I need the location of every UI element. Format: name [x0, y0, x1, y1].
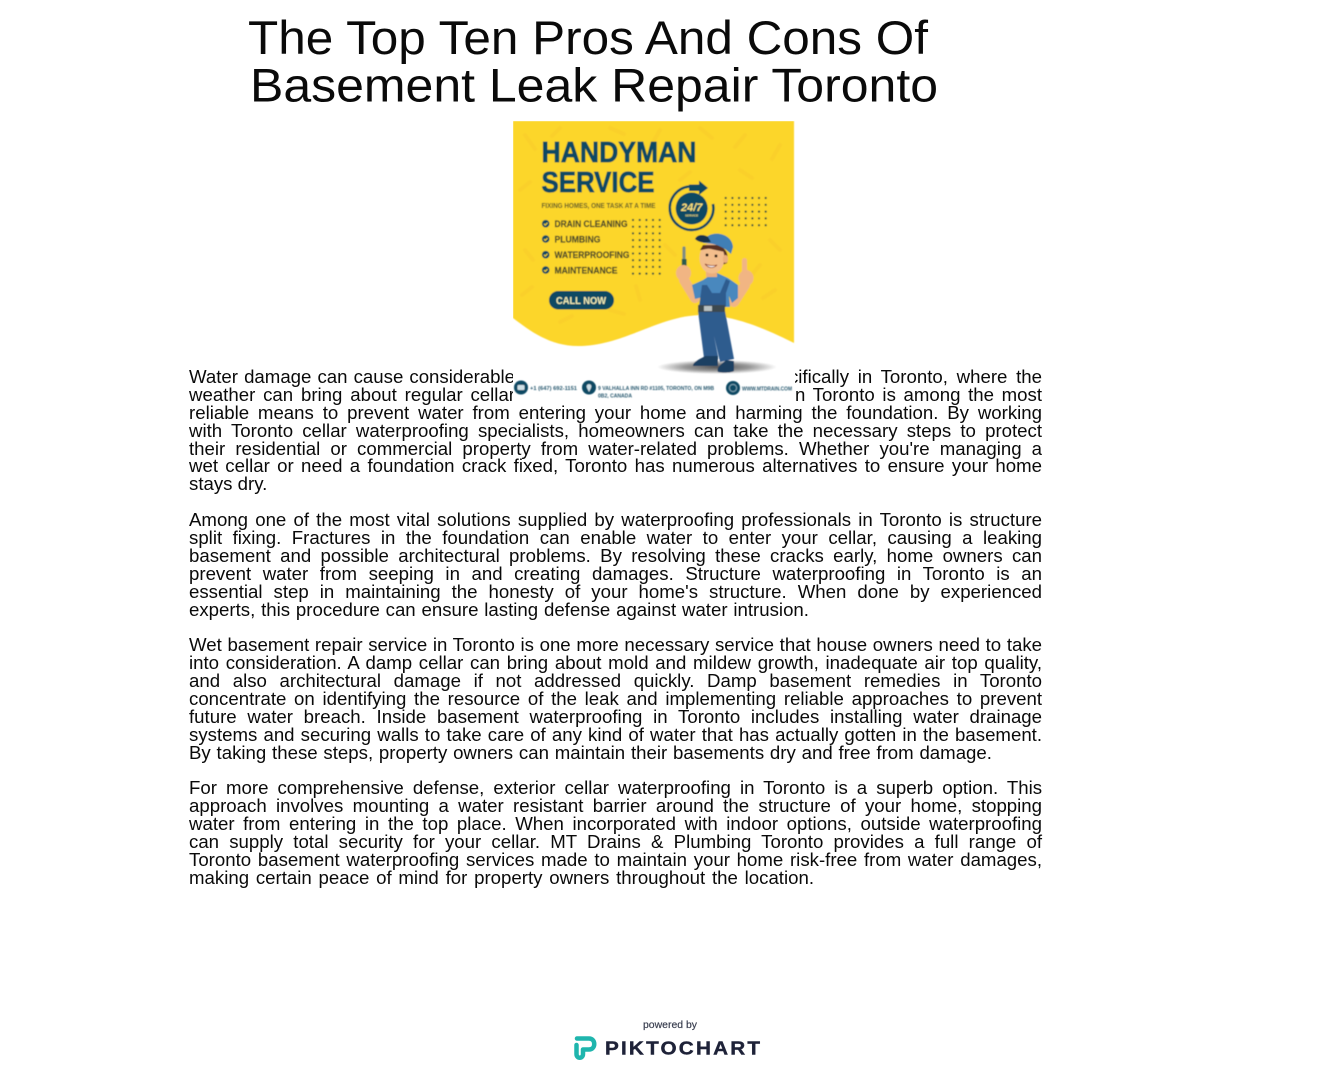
yellow wavy background: [513, 121, 794, 346]
paragraph: wet basement repair: concentrate on identifying the resource of the leak and implementing reliable approaches to prevent: [189, 689, 1042, 709]
heading: SERVICE: [542, 167, 654, 199]
title: The Top Ten Pros And Cons Of: [248, 11, 929, 64]
heading: [542, 137, 696, 199]
paragraph: foundation crack repair: basement and possible architectural problems. By resolving these cracks early, home owners can: [189, 546, 1042, 566]
paragraph: wet basement repair: and also architectural damage if not addressed quickly. Damp basement remedies in Toronto: [189, 671, 1042, 691]
paragraph: exterior waterproofing: Toronto basement waterproofing services made to maintain your home risk-free from water damages,: [189, 850, 1042, 870]
handyman service advert image: [513, 121, 795, 400]
powered by piktochart logo: [574, 1019, 760, 1060]
dot grids: [632, 197, 767, 275]
paragraph: foundation crack repair: experts, this procedure can ensure lasting defense against water intrusion.: [189, 600, 809, 620]
service checklist: DRAIN CLEANING: [554, 219, 628, 229]
paragraph: wet basement repair: systems and securing walls to take care of any kind of water that has actually gotten in the basement.: [189, 725, 1042, 745]
paragraph: foundation crack repair: Among one of the most vital solutions supplied by waterproofing professionals in Toronto is structure: [189, 510, 1042, 530]
paragraph: wet basement repair: [189, 635, 1042, 763]
title: [248, 11, 938, 112]
handyman character: [657, 234, 777, 374]
screwdriver: [682, 248, 686, 260]
paragraph: wet basement repair: future water breach. Inside basement waterproofing in Toronto includes installing water drainage: [189, 707, 1042, 727]
overalls: [699, 279, 730, 307]
paragraph: foundation crack repair: essential step in maintaining the honesty of your home's structure. When done by experienced: [189, 582, 1042, 602]
tagline: FIXING HOMES, ONE TASK AT A TIME: [542, 201, 656, 210]
paragraph: water damage intro: with Toronto cellar waterproofing specialists, homeowners can take the necessary steps to protect: [189, 421, 1042, 441]
contact: address: [582, 380, 714, 400]
contact: address: 9 VALHALLA INN RD #1105, TORONTO, ON M9B: [598, 386, 714, 392]
service checklist: [542, 219, 630, 276]
paragraph: wet basement repair: Wet basement repair service in Toronto is one more necessary service that house owners need to take: [189, 635, 1042, 655]
paragraph: wet basement repair: By taking these steps, property owners can maintain their basements dry and free from damage.: [189, 743, 992, 763]
paragraph: exterior waterproofing: making certain peace of mind for property owners throughout the location.: [189, 868, 814, 888]
title: Basement Leak Repair Toronto: [250, 58, 938, 112]
neck and head: [706, 266, 717, 277]
contact: phone: +1 (647) 692-1151: [530, 386, 577, 392]
powered by piktochart logo: PIKTOCHART: [605, 1038, 760, 1059]
paragraph: exterior waterproofing: For more comprehensive defense, exterior cellar waterproofing in Toronto is a superb option. This: [189, 778, 1042, 798]
service checklist: MAINTENANCE: [554, 266, 618, 276]
arms: [684, 280, 695, 298]
paragraph: water damage intro: n Toronto is among the most: [795, 385, 1042, 405]
cap: [703, 234, 733, 254]
paragraph: foundation crack repair: prevent water from seeping in and creating damages. Structure waterproofing in Toronto is an: [189, 564, 1042, 584]
paragraph: water damage intro: [189, 367, 1042, 494]
paragraph: water damage intro: their residential or commercial property from water-related problems. Whether you're managing a: [189, 439, 1042, 459]
hands: [676, 265, 691, 281]
paragraph: exterior waterproofing: [189, 778, 1042, 888]
icon: piktochart mark: [576, 1038, 594, 1058]
contact: address: 0B2, CANADA: [598, 394, 632, 400]
paragraph: wet basement repair: into consideration. A damp cellar can bring about mold and mildew growth, inadequate air top quality,: [189, 653, 1042, 673]
legs: [698, 311, 734, 362]
call now button: [549, 291, 614, 310]
service checklist: WATERPROOFING: [554, 250, 630, 260]
contact: website: WWW.MTDRAIN.COM: [742, 386, 792, 392]
powered by piktochart logo: powered by: [643, 1019, 698, 1031]
paragraph: exterior waterproofing: can supply total security for your cellar. MT Drains & Plumbing Toronto provides a full range of: [189, 832, 1042, 852]
paragraph: exterior waterproofing: approach involves mounting a water resistant barrier around the structure of your home, stopping: [189, 796, 1042, 816]
24/7 service badge: 24/7: [680, 202, 703, 214]
24/7 service badge: SERVICE: [685, 214, 698, 218]
service checklist: PLUMBING: [554, 234, 600, 244]
paragraph: foundation crack repair: [189, 510, 1042, 620]
paragraph: water damage intro: reliable means to prevent water from entering your home and harming the foundation. By working: [189, 403, 1042, 423]
paragraph: foundation crack repair: split fixing. Fractures in the foundation can enable water to enter your cellar, causing a leaking: [189, 528, 1042, 548]
paragraph: water damage intro: Water damage can cause considerable: [189, 367, 515, 387]
shirt and sleeves: [692, 272, 738, 307]
paragraph: water damage intro: weather can bring about regular cellar: [189, 385, 515, 405]
24/7 service badge: [670, 180, 713, 230]
contact: phone: [514, 380, 577, 394]
heading: HANDYMAN: [542, 137, 696, 169]
call now button: CALL NOW: [556, 295, 606, 307]
contact: website: [726, 381, 792, 395]
shoes: [693, 356, 718, 366]
paragraph: water damage intro: stays dry.: [189, 474, 267, 494]
belt: [698, 305, 725, 312]
paragraph: water damage intro: wet cellar or need a foundation crack fixed, Toronto has numerous alternatives to ensure your home: [189, 456, 1042, 476]
paragraph: exterior waterproofing: water from entering in the top place. When incorporated with indoor options, outside waterproofing: [189, 814, 1042, 834]
paragraph: water damage intro: cifically in Toronto, where the: [789, 367, 1042, 387]
